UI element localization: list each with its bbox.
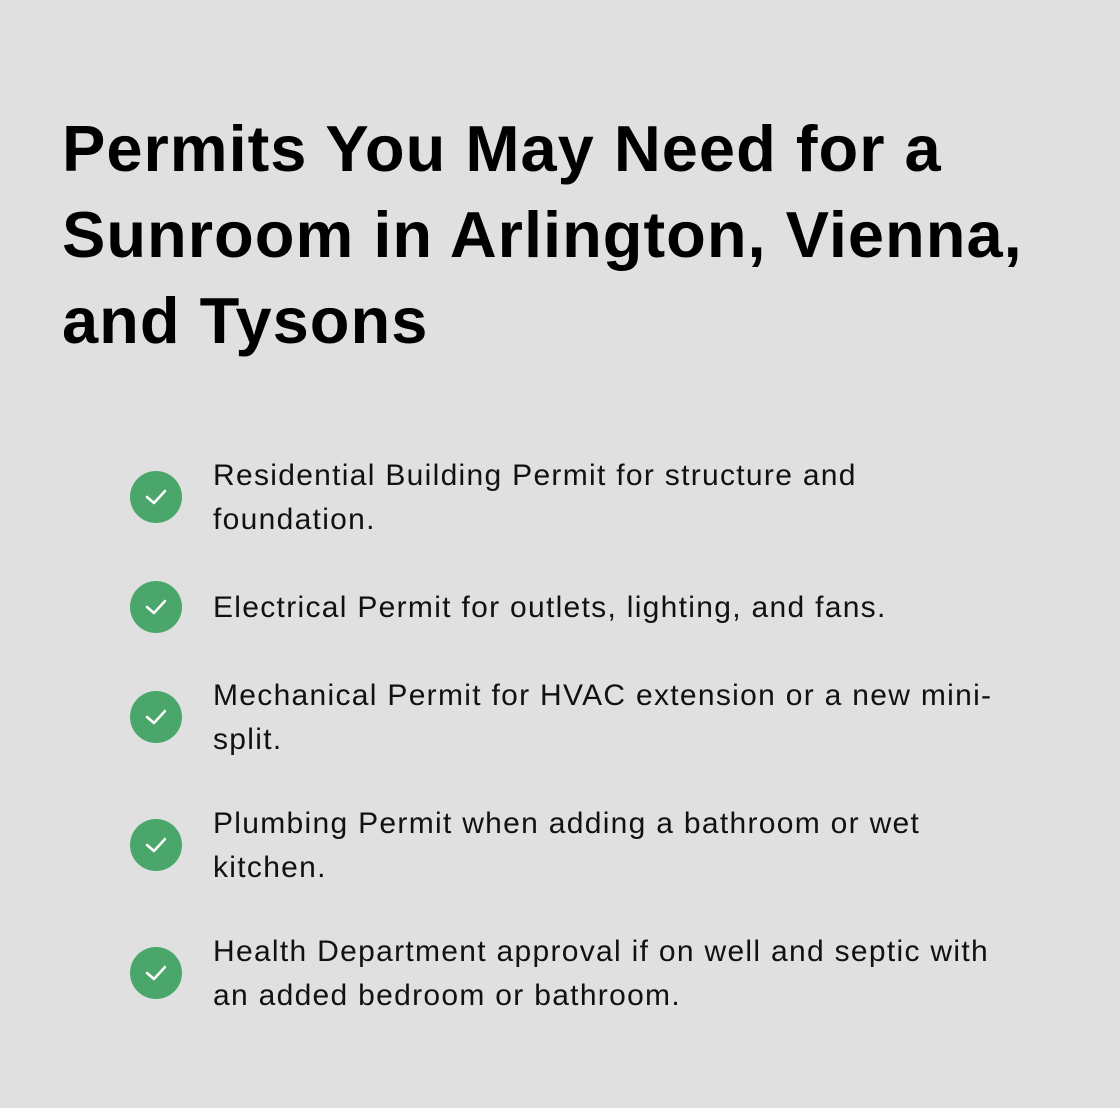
text: Electrical Permit for outlets, lighting, and fans. [213, 591, 887, 624]
text: Residential Building Permit for structure and [213, 459, 857, 492]
text: Plumbing Permit when adding a bathroom or wet [213, 807, 920, 840]
text: an added bedroom or bathroom. [213, 979, 681, 1012]
icon: check [130, 581, 182, 633]
icon: check [130, 691, 182, 743]
text [213, 459, 857, 536]
icon: check [130, 471, 182, 523]
text [213, 935, 989, 1012]
title: Sunroom in Arlington, Vienna, [62, 198, 1023, 271]
text: foundation. [213, 503, 376, 536]
item: electrical [130, 581, 887, 633]
item: building permit [130, 459, 857, 536]
text: Mechanical Permit for HVAC extension or a new mini- [213, 679, 992, 712]
item: plumbing [130, 807, 920, 884]
text: kitchen. [213, 851, 327, 884]
title: and Tysons [62, 284, 428, 357]
text: Health Department approval if on well and septic with [213, 935, 989, 968]
text: split. [213, 723, 282, 756]
title: Permits You May Need for a [62, 112, 942, 185]
icon: check [130, 947, 182, 999]
item: mechanical [130, 679, 992, 756]
text [213, 679, 992, 756]
title [62, 112, 1023, 357]
text [213, 807, 920, 884]
icon: check [130, 819, 182, 871]
item: health department [130, 935, 989, 1012]
